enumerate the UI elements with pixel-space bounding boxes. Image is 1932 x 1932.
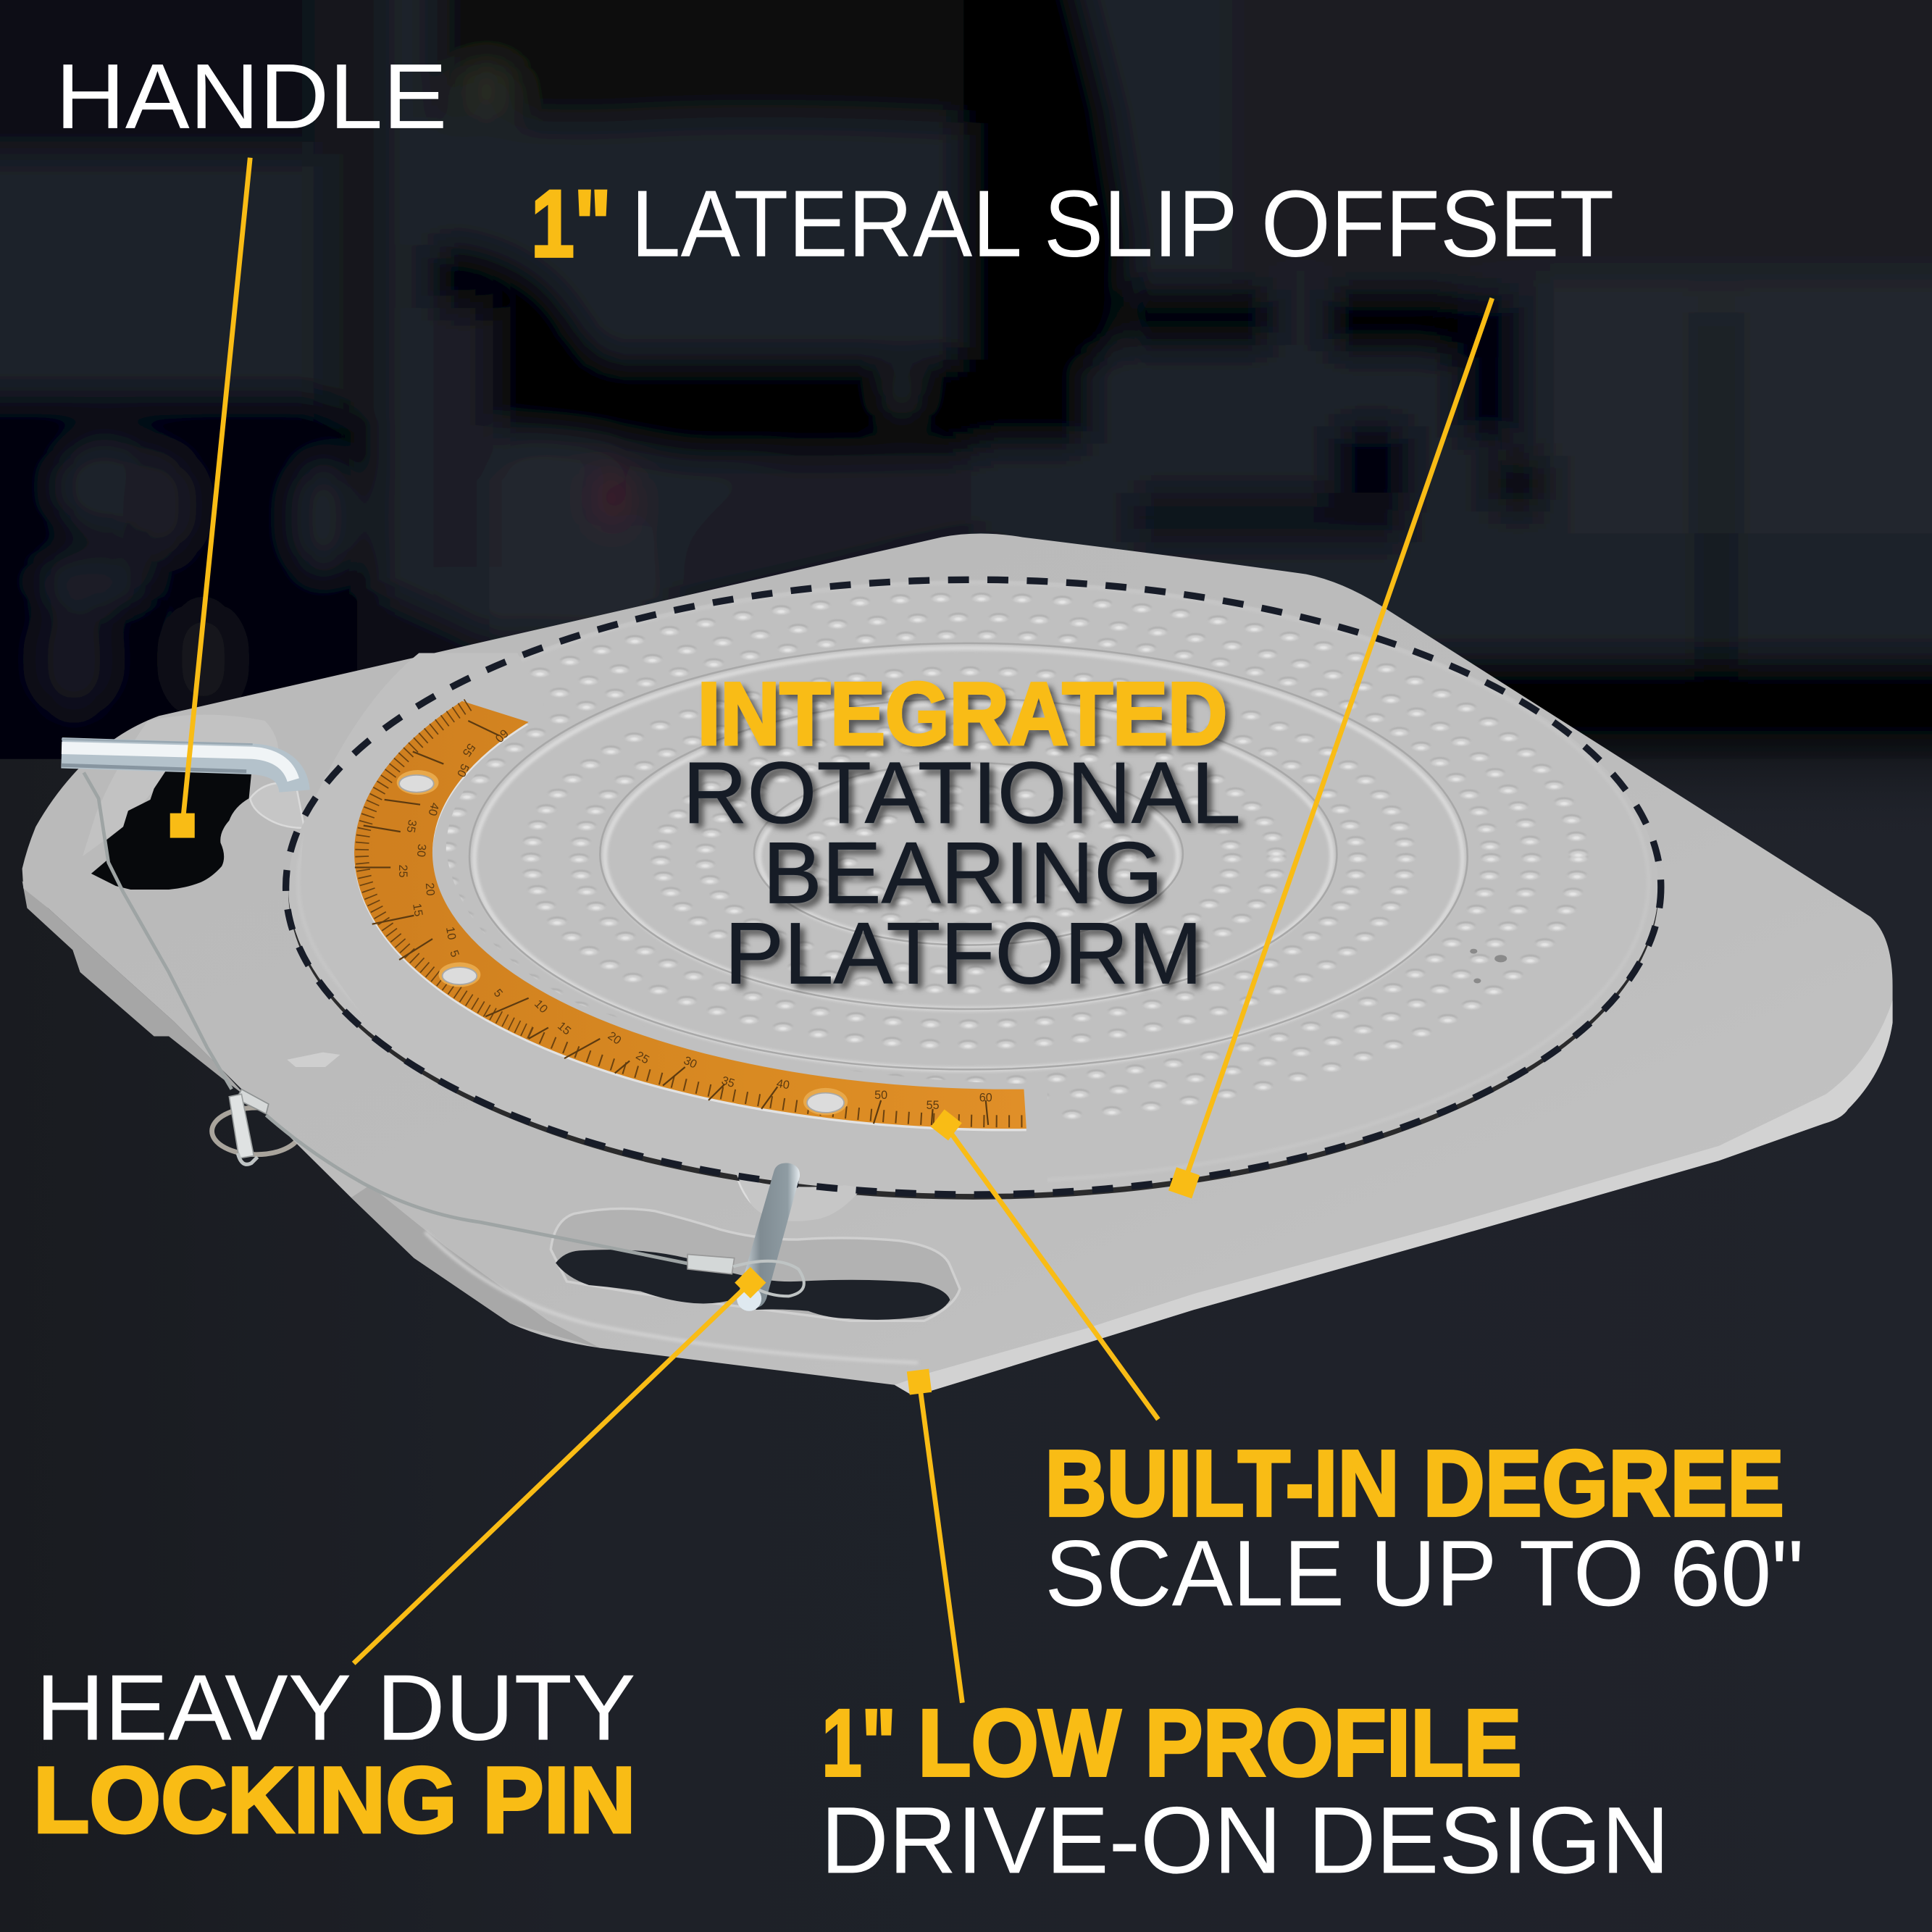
scale numbers: 40 (776, 1077, 790, 1092)
locking pin marker (735, 1267, 766, 1298)
scale numbers: 50 (874, 1089, 887, 1102)
major ticks (355, 721, 988, 1125)
level screws (397, 770, 848, 1115)
rotating disc (288, 580, 1658, 1194)
center heading: integrated rotational bearing platform (682, 664, 1241, 1002)
scale numbers: 5 (491, 987, 505, 1000)
locking pin text: LOCKING PIN (33, 1748, 636, 1852)
low profile text: 1" (821, 1689, 896, 1796)
scale numbers: 15 (555, 1019, 573, 1037)
locking pin (737, 1163, 800, 1311)
label: handle (56, 46, 447, 838)
floor (0, 759, 1932, 1932)
disc shadow ring (288, 583, 1658, 1200)
label: heavy duty locking pin (33, 1267, 766, 1852)
lower-left side shading (351, 1185, 600, 1348)
handle bracket (250, 782, 304, 828)
bracket over disc (735, 1171, 863, 1221)
scale numbers: 55 (460, 741, 478, 759)
car top (438, 0, 963, 123)
cable loop (733, 1261, 804, 1296)
turnplate product (22, 533, 1893, 1394)
plate side skirt (22, 881, 246, 1097)
handle text: HANDLE (56, 46, 447, 149)
upper-left dark (0, 0, 314, 154)
plain band around scale (301, 653, 1047, 1192)
scale numbers: 10 (443, 926, 459, 941)
degree scale text: SCALE UP TO 60" (1045, 1521, 1804, 1626)
scale numbers: 35 (720, 1074, 736, 1090)
raised disc rim (298, 583, 1649, 1182)
scale numbers: 10 (532, 998, 551, 1016)
low profile text: DRIVE-ON DESIGN (821, 1786, 1670, 1893)
label: lateral slip offset (531, 170, 1614, 1198)
center heading: integrated rotational bearing platform: BEARING (763, 824, 1163, 922)
scale numbers: 55 (927, 1099, 940, 1112)
scale numbers: 25 (634, 1049, 651, 1066)
scale numbers: 30 (414, 843, 428, 858)
scale numbers: 25 (396, 865, 409, 878)
lateral slip text: 1" (531, 170, 611, 277)
dashed disc outline (286, 580, 1661, 1195)
scale numbers: 20 (423, 882, 437, 896)
degree scale text: BUILT-IN DEGREE (1045, 1431, 1784, 1536)
plate body (22, 533, 1893, 1394)
scale numbers: 60 (493, 727, 511, 745)
handle hole (91, 770, 251, 890)
scale numbers: 35 (403, 819, 419, 834)
degree scale marker (931, 1109, 962, 1140)
raised dots (359, 598, 1578, 1119)
degree scale (354, 701, 1026, 1132)
low profile text: LOW PROFILE (918, 1689, 1522, 1796)
center heading: integrated rotational bearing platform: PLATFORM (724, 904, 1203, 1002)
scale numbers: 30 (682, 1054, 699, 1071)
carry slot recess (551, 1208, 960, 1321)
scale numbers: 20 (606, 1029, 624, 1047)
scale numbers: 15 (410, 903, 425, 918)
pin bracket (735, 1164, 850, 1220)
split ring behind plate (212, 1108, 301, 1155)
handle marker (170, 814, 195, 838)
arch + dark band (434, 244, 974, 456)
minor ticks (362, 705, 1026, 1121)
ridge shadows (469, 643, 1468, 1069)
plate lit edge band (895, 1000, 1893, 1394)
scale shadow edge (354, 703, 1026, 1132)
scale numbers: 40 (425, 801, 441, 817)
center heading: integrated rotational bearing platform: ROTATIONAL (682, 744, 1241, 842)
scale numbers: 60 (979, 1092, 992, 1105)
lateral slip marker (1168, 1167, 1200, 1198)
handle leader line (183, 158, 250, 826)
carry slot opening (556, 1250, 950, 1320)
lower-left dark (0, 397, 357, 838)
small holes (1470, 949, 1507, 983)
raised dots shadow layer (359, 596, 1578, 1117)
cable clip (229, 1090, 269, 1164)
cable crimp (687, 1255, 735, 1274)
scale numbers (396, 727, 992, 1112)
disc ridges (474, 648, 1463, 1069)
low profile leader line (919, 1381, 962, 1703)
scale numbers: 5 (447, 948, 461, 959)
label: built-in degree scale (931, 1109, 1804, 1626)
lateral slip leader line (1184, 298, 1492, 1183)
degree scale text (1045, 1431, 1804, 1626)
embossed arrow mark (287, 1053, 340, 1067)
lateral slip text: LATERAL SLIP OFFSET (631, 170, 1614, 277)
locking pin text: HEAVY DUTY (35, 1656, 636, 1760)
degree scale leader line (945, 1125, 1158, 1419)
low profile text (821, 1689, 1670, 1893)
safety cable (84, 772, 691, 1264)
locking pin leader line (354, 1283, 750, 1663)
scale plate (354, 701, 1026, 1129)
center-right shapes (493, 122, 961, 357)
handle hole recess (83, 715, 279, 856)
low profile marker (907, 1369, 932, 1394)
scale numbers: 50 (454, 762, 472, 779)
handle pin (62, 740, 295, 791)
locking pin text (33, 1656, 636, 1852)
label: low profile drive-on design (821, 1369, 1670, 1893)
left blobs (53, 438, 156, 536)
plate front lip (425, 1232, 918, 1363)
dot highlights (359, 599, 1578, 1120)
center heading: integrated rotational bearing platform: INTEGRATED (698, 664, 1227, 763)
